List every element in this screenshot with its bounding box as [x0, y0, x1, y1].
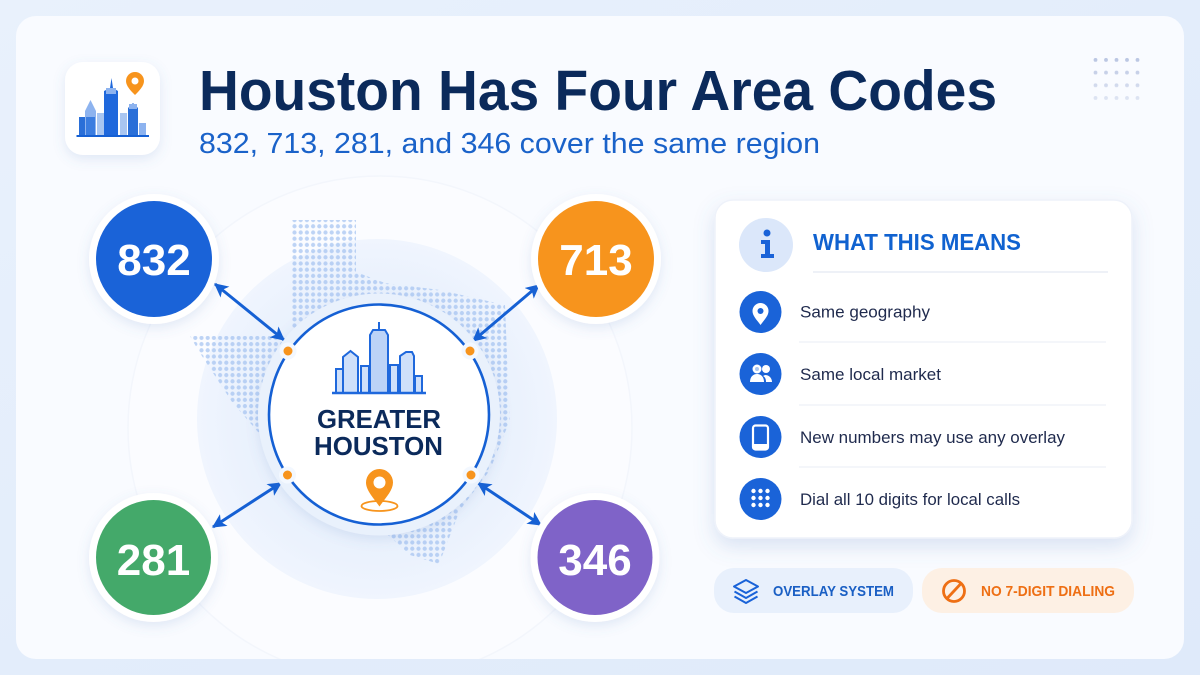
hub skyline icon [332, 322, 426, 393]
area code badge: 832: 832 [117, 236, 191, 285]
dotted Texas map [190, 220, 510, 564]
area code badge: 281: 281 [117, 536, 190, 585]
badge: overlay system: OVERLAY SYSTEM [773, 583, 894, 600]
badge: overlay system [714, 568, 913, 613]
row: same local market [740, 353, 941, 395]
hub label: GREATER [317, 404, 441, 434]
connector arrow: 346 [478, 483, 541, 525]
area code badge: 346: 346 [558, 536, 632, 585]
header icon: city skyline with pin [65, 62, 160, 155]
connector arrow: 832 [215, 284, 284, 340]
title: Houston Has Four Area Codes [199, 59, 997, 123]
background rings [197, 239, 557, 599]
hub: Greater Houston: HOUSTON [314, 431, 443, 461]
icon: info [739, 218, 793, 272]
decorative dots [1093, 57, 1140, 101]
connector arrow: 713 [473, 285, 539, 341]
badge: no 7-digit dialing: NO 7-DIGIT DIALING [981, 583, 1115, 600]
panel: what this means [715, 200, 1132, 538]
area code badge: 713: 713 [559, 236, 633, 285]
row: same local market: Same local market [800, 365, 941, 384]
subtitle: 832, 713, 281, and 346 cover the same region [199, 128, 820, 160]
hub location pin [362, 469, 398, 511]
row: dial all digits: Dial all 10 digits for local calls [800, 490, 1020, 509]
row: new numbers: New numbers may use any overlay [800, 428, 1065, 447]
hub: Greater Houston [258, 294, 500, 536]
area code badge: 832 [89, 194, 219, 324]
hub connection dots [281, 344, 478, 482]
row: same geography: Same geography [800, 302, 930, 322]
area code badge: 713 [531, 194, 661, 324]
panel heading: WHAT THIS MEANS [813, 229, 1021, 255]
badge: no 7-digit dialing [922, 568, 1134, 613]
row: new numbers [740, 416, 1065, 458]
row: same geography [740, 291, 930, 333]
area code badge: 281 [89, 493, 218, 622]
connector arrow: 281 [213, 483, 281, 527]
area code badge: 346 [530, 493, 660, 622]
row: dial all digits [740, 478, 1020, 520]
